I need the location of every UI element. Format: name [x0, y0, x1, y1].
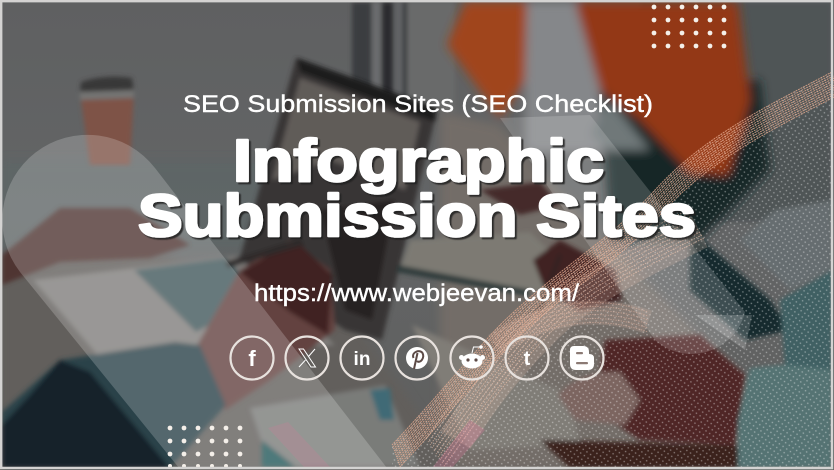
- subtitle: SEO Submission Sites (SEO Checklist): [183, 91, 653, 118]
- coffee cup: [80, 90, 134, 165]
- dot grid: bottom left: [168, 426, 242, 468]
- icon: tumblr: t: [524, 348, 531, 370]
- dot grid: top right: [652, 5, 726, 48]
- main title: Submission Sites: [138, 183, 696, 249]
- bottom right hand: [580, 335, 745, 445]
- translucent capsule shapes: [2, 115, 752, 468]
- icon: X: [286, 336, 328, 380]
- far hand with pen: [533, 240, 622, 310]
- paper chart on desk: [400, 232, 600, 300]
- icon: pinterest: [396, 336, 438, 380]
- icon: facebook: f: [248, 346, 256, 371]
- open notebook: [412, 325, 580, 450]
- right forearm holding pen: [197, 240, 335, 410]
- main title: [138, 128, 696, 249]
- dark laptop screen: [240, 58, 437, 340]
- social icons row: [230, 336, 604, 380]
- icon: reddit: [450, 336, 494, 380]
- icon: blogger: [560, 336, 604, 380]
- icon: linkedin: [340, 336, 384, 380]
- left hand over laptop: [2, 208, 190, 285]
- left suit sleeve: [2, 342, 226, 468]
- laptop base: [33, 256, 335, 358]
- website url: https://www.webjeevan.com/: [254, 280, 579, 307]
- right shirt sleeve: [738, 360, 832, 468]
- icon: facebook: [230, 336, 274, 380]
- icon: tumblr: [506, 336, 548, 380]
- icon: linkedin: in: [354, 349, 370, 370]
- main title: Infographic: [233, 128, 604, 194]
- dotted wave mesh: [268, 72, 834, 468]
